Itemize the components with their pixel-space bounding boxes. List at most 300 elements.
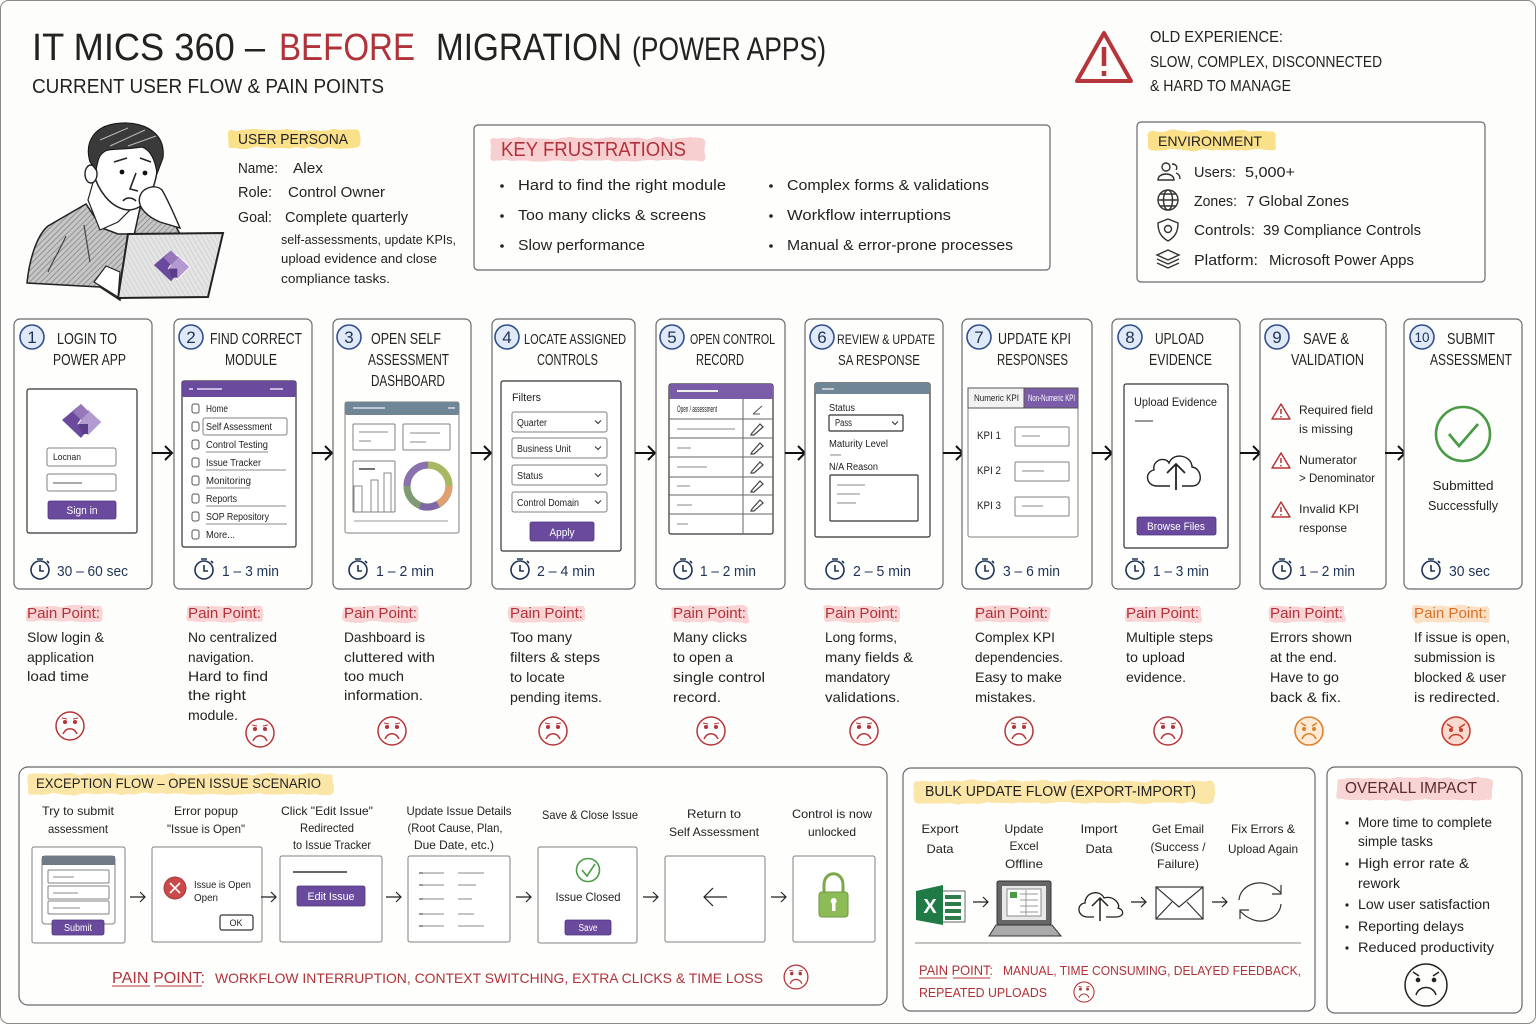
pain point 2: Pain Point: [188, 605, 261, 622]
step number 10: 10 [1414, 329, 1430, 345]
exception pain point: WORKFLOW INTERRUPTION, CONTEXT SWITCHING, EXTRA CLICKS & TIME LOSS [215, 970, 763, 986]
duration [511, 559, 595, 580]
heading: key frustrations: KEY FRUSTRATIONS [501, 139, 686, 161]
pain point 8 [1125, 605, 1213, 745]
flow labels: Upload Again [1228, 842, 1298, 856]
validation errors list: Numerator [1299, 453, 1357, 467]
pain point 1: Pain Point: [27, 605, 100, 622]
duration [195, 559, 279, 580]
panel: user persona: compliance tasks. [281, 271, 390, 286]
flow labels: Get Email [1152, 822, 1204, 836]
icon: warning triangle [1077, 33, 1131, 81]
pain point 6: mandatory [825, 669, 890, 685]
step 6: review and update sa response: REVIEW & UPDATE [837, 331, 935, 347]
frustrations left column: Slow performance [518, 237, 645, 254]
title: MIGRATION [436, 27, 622, 69]
icon: layers [1157, 250, 1179, 268]
pain point 4: Too many [510, 629, 572, 645]
step 9: save and validation: SAVE & [1303, 331, 1349, 348]
step 9: save and validation [1260, 319, 1386, 589]
pain point 1: application [27, 649, 94, 665]
step: error popup: "Issue is Open" [167, 822, 245, 836]
navigation menu mockup: Home [206, 404, 228, 415]
step 4: locate assigned controls: LOCATE ASSIGNED [524, 331, 626, 348]
panel: environment: Controls: [1194, 222, 1255, 239]
heading: user persona: USER PERSONA [238, 131, 348, 148]
frustrations left column: Too many clicks & screens [518, 207, 706, 224]
validation errors list: Required field [1299, 403, 1373, 417]
step 8: upload evidence: UPLOAD [1155, 331, 1204, 348]
step: error popup: Open [194, 893, 218, 904]
flow labels: Export [922, 822, 959, 836]
kpi form mockup: Non-Numeric KPI [1028, 393, 1075, 403]
step number 4: 4 [502, 328, 512, 347]
step number 1 [20, 325, 44, 349]
icon: globe [1158, 190, 1178, 210]
pain point 6: Long forms, [825, 629, 897, 645]
panel: environment: 5,000+ [1245, 164, 1295, 181]
pain point 8: Multiple steps [1126, 629, 1213, 645]
impact list: simple tasks [1358, 833, 1433, 849]
navigation menu mockup: SOP Repository [206, 512, 269, 523]
step number 9 [1265, 325, 1289, 349]
pain point 9: at the end. [1270, 649, 1337, 665]
pain point 9 [1269, 605, 1352, 745]
heading: environment [1148, 131, 1275, 150]
arrow [1385, 446, 1405, 460]
icon: cloud upload [1079, 893, 1123, 921]
duration: 30 – 60 sec [57, 563, 128, 580]
duration: 2 – 5 min [853, 563, 911, 580]
panel: environment: Microsoft Power Apps [1269, 252, 1414, 269]
duration [31, 559, 128, 580]
step 6: review and update sa response [805, 319, 943, 589]
step: try to submit [32, 804, 125, 943]
pain point 7: dependencies. [975, 649, 1063, 665]
pain point 4: pending items. [510, 689, 602, 705]
step 2: find correct module: MODULE [225, 352, 277, 369]
navigation menu mockup: More... [206, 530, 235, 541]
records table mockup [669, 384, 773, 534]
step number 8: 8 [1125, 328, 1135, 347]
icon: laptop with spreadsheet [989, 881, 1061, 936]
kpi form mockup: Numeric KPI [974, 393, 1019, 403]
step number 6: 6 [817, 328, 827, 347]
callout: old experience: OLD EXPERIENCE: [1150, 29, 1283, 46]
response form mockup: N/A Reason [829, 462, 878, 473]
step 10: submit assessment [1404, 319, 1522, 589]
duration: 1 – 3 min [1153, 563, 1209, 580]
step 9: save and validation: VALIDATION [1291, 352, 1364, 369]
icon: green padlock [819, 874, 848, 917]
step: edit issue: Redirected [300, 821, 354, 835]
pain point 8: Pain Point: [1126, 605, 1199, 622]
upload mockup: Browse Files [1147, 521, 1205, 533]
donut chart [407, 465, 449, 507]
duration: 1 – 3 min [222, 563, 279, 580]
callout: old experience: & HARD TO MANAGE [1150, 78, 1291, 95]
pain point 2: module. [188, 707, 238, 723]
panel: user persona [228, 130, 456, 286]
arrow [943, 446, 963, 460]
duration [674, 559, 756, 580]
flow labels: Update [1004, 822, 1044, 836]
step number 7: 7 [974, 328, 984, 347]
arrow [785, 446, 805, 460]
kpi form mockup: KPI 1 [977, 430, 1001, 442]
step 4: locate assigned controls [492, 319, 635, 589]
panel: user persona: Control Owner [288, 184, 385, 201]
kpi form mockup: KPI 2 [977, 465, 1001, 477]
panel: overall impact [1327, 767, 1522, 1013]
impact list: More time to complete [1358, 814, 1492, 830]
frustrations right column: Complex forms & validations [787, 177, 989, 194]
pain point 2: the right [188, 687, 246, 703]
arrow [516, 892, 531, 902]
kpi form mockup [968, 388, 1078, 537]
pain point 4 [509, 605, 602, 745]
step 1: login to power app: POWER APP [53, 352, 126, 369]
flow labels: Data [1086, 842, 1113, 856]
validation errors list: response [1299, 521, 1347, 535]
step: return to self assessment: Self Assessment [669, 825, 760, 839]
step number 7 [967, 325, 991, 349]
step number 6 [810, 325, 834, 349]
arrow [635, 446, 655, 460]
pain point 10: submission is [1414, 649, 1495, 665]
flow labels: Fix Errors & [1231, 822, 1295, 836]
icon: very sad face [1405, 964, 1447, 1006]
impact list: Reporting delays [1358, 918, 1464, 934]
step number 3: 3 [344, 328, 354, 347]
step 2: find correct module: FIND CORRECT [210, 331, 302, 348]
duration: 1 – 2 min [1299, 563, 1355, 580]
pain point 9: Pain Point: [1270, 605, 1343, 622]
panel: environment: Users: [1194, 164, 1236, 181]
step 3: open self assessment dashboard: ASSESSMENT [368, 352, 449, 369]
pain point 10: blocked & user [1414, 669, 1506, 685]
pain point 6: many fields & [825, 649, 914, 665]
duration: 1 – 2 min [376, 563, 434, 580]
exception pain point [112, 965, 808, 989]
pain point 10: Pain Point: [1414, 605, 1487, 622]
step number 2 [179, 325, 203, 349]
pain point 6: validations. [825, 689, 900, 705]
arrow [973, 897, 988, 907]
pain point 9: Have to go [1270, 669, 1339, 685]
response form mockup: Status [829, 403, 855, 414]
step: edit issue: Click "Edit Issue" [281, 804, 373, 818]
pain point 2 [187, 605, 277, 747]
icon: success check [1436, 407, 1490, 461]
pain point 6: Pain Point: [825, 605, 898, 622]
pain point 7: mistakes. [975, 689, 1036, 705]
step: error popup: Error popup [174, 804, 238, 818]
impact list: rework [1358, 875, 1401, 891]
navigation menu mockup: Issue Tracker [206, 458, 262, 469]
pain point 4: to locate [510, 669, 565, 685]
pain point 5: Many clicks [673, 629, 747, 645]
step: error popup: OK [229, 918, 243, 928]
login screen mockup: Sign in [66, 505, 98, 517]
panel: user persona: Alex [293, 160, 324, 177]
panel: user persona: Goal: [238, 209, 272, 226]
arrow [1131, 897, 1146, 907]
filters mockup: Filters [512, 392, 541, 404]
step 7: update kpi responses: UPDATE KPI [998, 331, 1071, 348]
flow labels: Offline [1005, 857, 1043, 871]
step: return to self assessment: Return to [687, 807, 741, 821]
step: save and close issue: Issue Closed [556, 890, 620, 904]
panel: user persona: Role: [238, 184, 272, 201]
title: BEFORE [279, 27, 415, 69]
arrow [1240, 446, 1260, 460]
pain point 10: is redirected. [1414, 689, 1500, 705]
validation errors list: Invalid KPI [1299, 502, 1359, 516]
step 10: submit assessment: SUBMIT [1447, 331, 1495, 348]
upload mockup: Upload Evidence [1134, 395, 1217, 409]
frustrations left column [500, 177, 726, 254]
duration: 2 – 4 min [537, 563, 595, 580]
step 5: open control record [656, 319, 785, 589]
navigation menu mockup [182, 381, 296, 547]
pain point 9: back & fix. [1270, 689, 1341, 705]
step: update issue details: (Root Cause, Plan, [408, 821, 502, 835]
step: try to submit: Try to submit [42, 804, 115, 818]
pain point 2: Hard to find [188, 668, 268, 684]
filters mockup: Quarter [517, 418, 548, 429]
frustrations right column: Manual & error-prone processes [787, 237, 1013, 254]
step: control unlocked: unlocked [808, 825, 856, 839]
icon: angry face [1442, 717, 1470, 745]
step: update issue details [406, 804, 512, 942]
pain point 5 [672, 605, 765, 745]
pain point 2: navigation. [188, 649, 254, 665]
panel: environment [1137, 122, 1485, 282]
response form mockup: Maturity Level [829, 439, 888, 450]
arrow [312, 446, 332, 460]
duration [1126, 559, 1209, 580]
title: (POWER APPS) [632, 31, 826, 67]
flow labels: Failure) [1157, 857, 1199, 871]
pain point 4: filters & steps [510, 649, 600, 665]
navigation menu mockup: Self Assessment [206, 422, 272, 433]
kpi form mockup: KPI 3 [977, 500, 1001, 512]
navigation menu mockup: Control Testing [206, 440, 268, 451]
success message: Successfully [1428, 498, 1498, 513]
step 6: review and update sa response: SA RESPONSE [838, 352, 920, 369]
panel: environment: 7 Global Zones [1246, 193, 1349, 210]
step: edit issue: Edit Issue [308, 891, 354, 903]
step 5: open control record: OPEN CONTROL [690, 331, 775, 348]
impact list: High error rate & [1358, 855, 1470, 871]
pain point 5: single control [673, 669, 765, 685]
step 3: open self assessment dashboard: DASHBOARD [371, 373, 445, 390]
step 7: update kpi responses [962, 319, 1092, 589]
step 1: login to power app: LOGIN TO [57, 331, 117, 348]
step number 10 [1410, 325, 1434, 349]
step: control unlocked [792, 807, 875, 942]
step 5: open control record: RECORD [696, 352, 744, 369]
icon: email envelope [1156, 887, 1203, 919]
icon: stressed orange face [1295, 717, 1323, 745]
impact list: Reduced productivity [1358, 939, 1494, 955]
flow labels: Excel [1010, 839, 1038, 853]
login screen mockup: Locnan [53, 452, 81, 462]
pain point 8: to upload [1126, 649, 1185, 665]
pain point 10: If issue is open, [1414, 629, 1510, 645]
step number 2: 2 [186, 328, 196, 347]
panel: bulk update flow [903, 768, 1315, 1011]
step number 5 [660, 325, 684, 349]
heading: exception flow: EXCEPTION FLOW – OPEN ISSUE SCENARIO [36, 775, 321, 791]
arrow [471, 446, 491, 460]
duration [1273, 559, 1355, 580]
heading: overall impact: OVERALL IMPACT [1345, 780, 1477, 797]
step 2: find correct module [174, 319, 312, 589]
icon: users [1158, 163, 1180, 180]
pain point 1 [26, 605, 105, 740]
filters mockup: Business Unit [517, 444, 571, 455]
step 1: login to power app [14, 319, 152, 589]
step: save and close issue: Save & Close Issue [542, 808, 638, 822]
bulk pain point: MANUAL, TIME CONSUMING, DELAYED FEEDBACK, [1003, 963, 1301, 978]
step number 5: 5 [667, 328, 677, 347]
step: try to submit: Submit [64, 923, 92, 934]
impact list [1345, 814, 1494, 955]
success message [1428, 478, 1498, 513]
flow labels: Data [926, 842, 954, 856]
arrow [643, 892, 658, 902]
panel: environment: 39 Compliance Controls [1263, 222, 1421, 239]
subtitle: CURRENT USER FLOW & PAIN POINTS [32, 76, 384, 98]
navigation menu mockup: Reports [206, 494, 237, 505]
step: edit issue: to Issue Tracker [293, 838, 371, 852]
frustrations left column: Hard to find the right module [518, 177, 726, 194]
step: save and close issue [538, 808, 638, 943]
pain point 2: No centralized [188, 629, 277, 645]
filters mockup: Status [517, 471, 543, 482]
arrow [152, 446, 172, 460]
panel: user persona: Name: [238, 160, 278, 177]
step number 3 [337, 325, 361, 349]
step 3: open self assessment dashboard [333, 319, 471, 589]
pain point 3: Pain Point: [344, 605, 417, 622]
step number 1: 1 [27, 328, 37, 347]
pain point 9: Errors shown [1270, 629, 1352, 645]
success message: Submitted [1432, 478, 1494, 493]
pain point 7: Easy to make [975, 669, 1062, 685]
step: edit issue [280, 804, 382, 942]
pain point 1: load time [27, 668, 89, 684]
response form mockup: Pass [835, 418, 852, 429]
arrow [261, 892, 276, 902]
panel: user persona: upload evidence and close [281, 251, 437, 266]
filters mockup [501, 381, 621, 551]
step: try to submit: assessment [48, 822, 109, 836]
validation errors list: is missing [1299, 422, 1353, 436]
duration: 1 – 2 min [700, 563, 756, 580]
pain point 10 [1413, 605, 1510, 745]
pain point 4: Pain Point: [510, 605, 583, 622]
duration: 3 – 6 min [1003, 563, 1060, 580]
step number 8 [1118, 325, 1142, 349]
arrow [130, 892, 145, 902]
navigation menu mockup: Monitoring [206, 476, 251, 487]
arrow [1092, 446, 1112, 460]
heading: bulk update flow: BULK UPDATE FLOW (EXPORT-IMPORT) [925, 783, 1196, 800]
panel: user persona: self-assessments, update KPIs, [281, 232, 456, 247]
flow labels [922, 822, 1298, 871]
records table mockup: Open / assessment [677, 404, 717, 414]
filters mockup: Control Domain [517, 498, 579, 509]
frustrations right column: Workflow interruptions [787, 207, 951, 224]
duration: 30 sec [1449, 563, 1490, 580]
pain point 3: too much [344, 668, 404, 684]
callout: old experience: SLOW, COMPLEX, DISCONNECTED [1150, 54, 1382, 71]
bulk pain point: REPEATED UPLOADS [919, 985, 1047, 1000]
validation errors list: > Denominator [1299, 471, 1375, 485]
login screen mockup [27, 389, 137, 533]
panel: environment: Platform: [1194, 252, 1258, 269]
step: control unlocked: Control is now [792, 807, 872, 821]
pain point 8: evidence. [1126, 669, 1186, 685]
panel: environment: Zones: [1194, 193, 1237, 210]
pain point 5: Pain Point: [673, 605, 746, 622]
step: error popup [152, 804, 262, 942]
step 7: update kpi responses: RESPONSES [997, 352, 1068, 369]
pain point 7: Pain Point: [975, 605, 1048, 622]
step 8: upload evidence: EVIDENCE [1149, 352, 1212, 369]
pain point 1: Slow login & [27, 629, 105, 645]
pain point 3: information. [344, 687, 423, 703]
duration [349, 559, 434, 580]
bulk pain point: PAIN POINT: [919, 962, 993, 978]
frustrations right column [769, 177, 1013, 254]
title [32, 27, 826, 69]
duration [826, 559, 911, 580]
pain point 6 [824, 605, 914, 745]
duration [1422, 559, 1490, 580]
pain point 5: to open a [673, 649, 733, 665]
arrow [771, 892, 786, 902]
step number 4 [495, 325, 519, 349]
step 8: upload evidence [1112, 319, 1240, 589]
pain point 3: cluttered with [344, 649, 435, 665]
validation errors list [1272, 403, 1375, 535]
dashboard mockup [345, 402, 459, 533]
duration [976, 559, 1060, 580]
panel: user persona: Complete quarterly [285, 209, 408, 226]
icon: excel [916, 885, 965, 925]
exception pain point: PAIN POINT: [112, 970, 205, 987]
callout: old experience [1077, 29, 1382, 95]
pain point 5: record. [673, 689, 721, 705]
impact list: Low user satisfaction [1358, 896, 1490, 912]
arrow [386, 892, 401, 902]
icon: excel: X [923, 896, 937, 918]
icon: cloud upload [1148, 456, 1200, 490]
step 3: open self assessment dashboard: OPEN SELF [371, 331, 441, 348]
step: error popup: Issue is Open [194, 880, 251, 891]
pain point 7 [974, 605, 1063, 745]
step: update issue details: Update Issue Details [406, 804, 512, 818]
step number 9: 9 [1272, 328, 1282, 347]
upload mockup [1124, 384, 1228, 548]
title: IT MICS 360 – [32, 27, 266, 69]
icon: refresh arrows [1239, 883, 1281, 921]
bulk pain point [919, 962, 1301, 1002]
